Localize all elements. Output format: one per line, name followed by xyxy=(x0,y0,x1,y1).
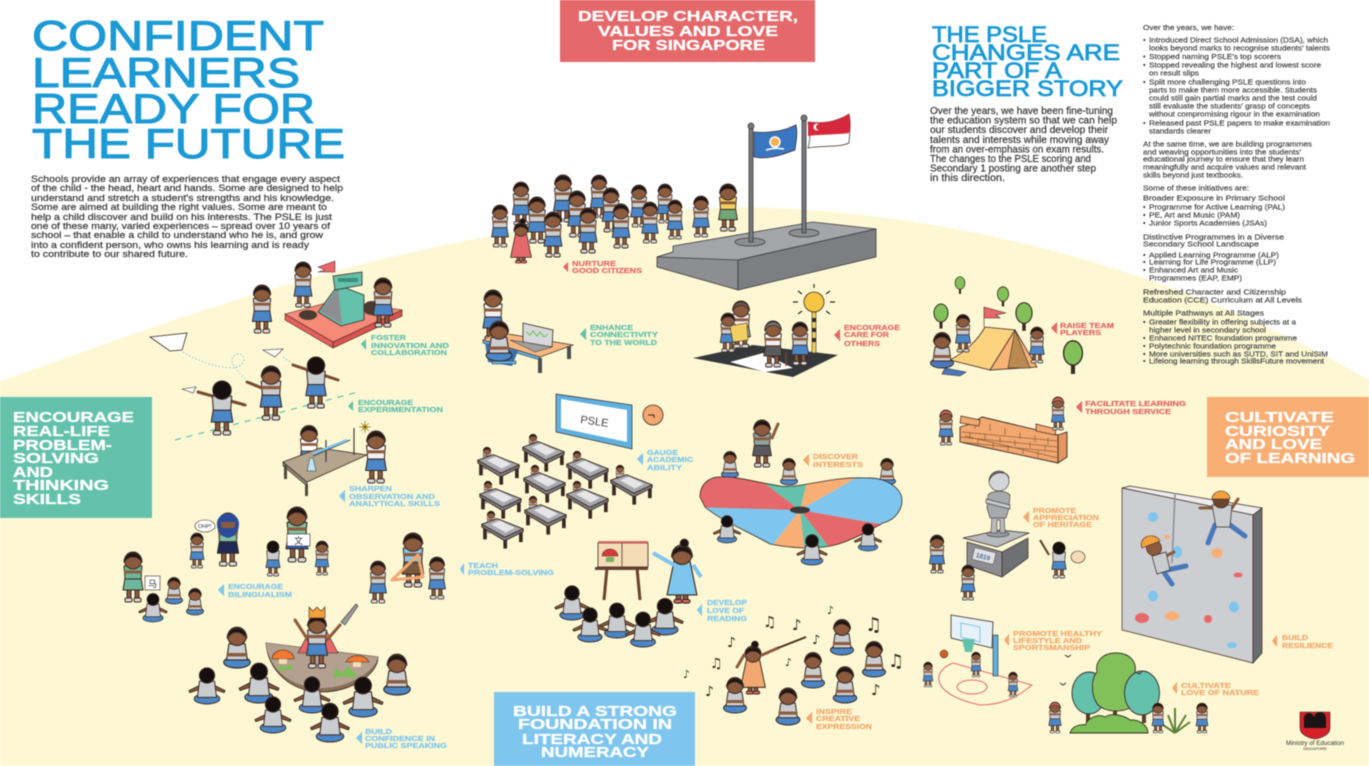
scene: teach problem solving xyxy=(370,533,445,603)
label: promote heritage: OF HERITAGE xyxy=(1033,520,1092,529)
label: facilitate learning: FACILITATE LEARNING xyxy=(1085,399,1186,408)
music notes: ♪ xyxy=(785,656,792,669)
label: encourage care: OTHERS xyxy=(844,339,880,348)
heading: the PSLE changes: CHANGES ARE xyxy=(932,40,1120,65)
banner: real-life problem solving: ENCOURAGE xyxy=(13,410,134,426)
scene: laptop and connectivity xyxy=(483,290,573,373)
initiatives text column: Enhanced Art and Music xyxy=(1149,266,1238,274)
banner: develop character xyxy=(560,0,815,62)
initiatives text column: Junior Sports Academies (JSAs) xyxy=(1149,218,1267,228)
label: gauge academic ability: GAUGE xyxy=(647,448,678,457)
heading: the PSLE changes: BIGGER STORY xyxy=(932,76,1123,101)
scene: crossing, encourage care xyxy=(693,284,838,377)
school flag xyxy=(754,125,797,158)
music notes: ♫ xyxy=(888,651,904,672)
initiatives text column: • xyxy=(1143,202,1146,212)
label: raise team players: PLAYERS xyxy=(1060,328,1101,337)
wall clock xyxy=(643,405,663,425)
PSLE story paragraph: Secondary 1 posting are another step xyxy=(930,164,1096,175)
intro paragraph: Some are aimed at building the right values. Some are meant to xyxy=(31,201,327,212)
label: enhance connectivity: TO THE WORLD xyxy=(590,338,657,347)
scene: paper planes xyxy=(150,333,358,440)
label: encourage bilingualism: ENCOURAGE xyxy=(228,582,283,591)
scene: climbing wall xyxy=(1122,486,1262,663)
label: foster innovation: FOSTER xyxy=(371,333,407,342)
initiatives text column: Greater flexibility in offering subjects at a xyxy=(1149,318,1297,326)
plinth xyxy=(963,530,1029,577)
label: foster innovation xyxy=(361,333,449,357)
label: inspire creative expression: INSPIRE xyxy=(816,707,852,716)
initiatives text column: • xyxy=(1143,266,1146,274)
heading: the PSLE changes xyxy=(932,22,1123,101)
label: nurture good citizens: NURTURE xyxy=(572,259,616,268)
banner: real-life problem solving: SOLVING xyxy=(13,451,99,467)
heading: the PSLE changes: PART OF A xyxy=(932,58,1062,83)
label: cultivate love of nature: CULTIVATE xyxy=(1181,681,1231,690)
intro paragraph: understand and stretch a student's strengths and his knowledge. xyxy=(31,192,334,203)
label: enhance connectivity: CONNECTIVITY xyxy=(590,330,658,339)
initiatives text column: Stopped naming PSLE's top scorers xyxy=(1149,52,1281,61)
banner: cultivate curiosity: CULTIVATE xyxy=(1225,410,1334,426)
teacher with card xyxy=(286,507,310,562)
whiteboard: PSLE xyxy=(580,414,609,430)
whiteboard xyxy=(556,394,632,449)
initiatives text column: PE, Art and Music (PAM) xyxy=(1149,210,1240,220)
label: teach problem solving: TEACH xyxy=(468,561,498,570)
intro paragraph xyxy=(31,173,343,259)
initiatives text column: Multiple Pathways at All Stages xyxy=(1143,308,1264,318)
scene: bilingual lessons: 马 xyxy=(148,579,157,589)
music notes: ♪ xyxy=(812,633,820,648)
intro paragraph: into a confident person, who owns his learning and is ready xyxy=(31,239,309,250)
label: develop love of reading: DEVELOP xyxy=(707,598,747,607)
music notes: ♪ xyxy=(871,681,881,699)
intro paragraph: help a child discover and build on his interests. The PSLE is just xyxy=(31,211,332,222)
initiatives text column: Enhanced NITEC foundation programme xyxy=(1149,334,1297,342)
label: discover interests: DISCOVER xyxy=(813,452,859,461)
seated audience xyxy=(189,627,410,742)
banner: literacy and numeracy xyxy=(494,692,695,766)
label: sharpen observation: OBSERVATION AND xyxy=(349,492,435,501)
banner: real-life problem solving: AND xyxy=(13,465,53,481)
initiatives text column: Some of these initiatives are: xyxy=(1143,184,1249,192)
intro paragraph: Schools provide an array of experiences that engage every aspect xyxy=(31,173,340,184)
label: build resilience: RESILIENCE xyxy=(1282,641,1333,650)
label: inspire creative expression: EXPRESSION xyxy=(816,722,872,731)
banner: literacy and numeracy: NUMERACY xyxy=(541,745,649,761)
label: cultivate love of nature: LOVE OF NATURE xyxy=(1181,688,1259,697)
label: nurture good citizens: GOOD CITIZENS xyxy=(572,266,642,275)
mushrooms and grass xyxy=(272,650,369,677)
banner: develop character: DEVELOP CHARACTER, xyxy=(578,9,798,25)
music notes: ♪ xyxy=(792,616,802,634)
plaque 1819: 1819 xyxy=(975,552,991,563)
banner: cultivate curiosity: OF LEARNING xyxy=(1225,451,1355,467)
label: enhance connectivity: ENHANCE xyxy=(590,323,633,332)
label: build resilience xyxy=(1272,633,1333,650)
initiatives text column: Refreshed Character and Citizenship xyxy=(1143,288,1286,296)
initiatives text column: Learning for Life Programme (LLP) xyxy=(1149,258,1276,266)
initiatives text column: Polytechnic foundation programme xyxy=(1149,342,1276,350)
scene: basketball court xyxy=(923,615,1032,705)
intro paragraph: of the child - the head, heart and hands. Some are designed to help xyxy=(31,182,343,193)
logo: Ministry of Education xyxy=(1286,712,1344,751)
scene: heritage statue xyxy=(929,471,1085,600)
banner: real-life problem solving: REAL-LIFE xyxy=(13,424,110,440)
scene: music conducting xyxy=(683,604,904,725)
label: build confidence xyxy=(356,727,447,750)
intro paragraph: one of these many, varied experiences – spread over 10 years of xyxy=(31,220,330,231)
initiatives text column: Split more challenging PSLE questions into xyxy=(1149,78,1306,86)
label: teach problem solving: PROBLEM-SOLVING xyxy=(468,568,554,577)
initiatives text column: • xyxy=(1143,118,1146,128)
label: raise team players: RAISE TEAM xyxy=(1060,321,1114,330)
label: encourage care xyxy=(834,323,900,348)
initiatives text column: educational journey to ensure that they learn xyxy=(1143,154,1304,164)
initiatives text column: • xyxy=(1143,52,1146,61)
label: foster innovation: COLLABORATION xyxy=(371,348,447,357)
yellow ground arc xyxy=(0,207,1369,766)
initiatives text column: • xyxy=(1143,60,1146,70)
label: encourage experimentation: ENCOURAGE xyxy=(358,398,413,407)
banner: real-life problem solving: PROBLEM- xyxy=(13,438,112,454)
initiatives text column: skills beyond just textbooks. xyxy=(1143,170,1243,180)
initiatives text column: Programme for Active Learning (PAL) xyxy=(1149,202,1285,212)
king with cape and sword xyxy=(295,604,358,668)
label: promote heritage xyxy=(1023,506,1099,529)
initiatives text column: • xyxy=(1143,210,1146,220)
banner: develop character: VALUES AND LOVE xyxy=(598,24,778,40)
initiatives text column: Applied Learning Programme (ALP) xyxy=(1149,250,1279,260)
assembled students xyxy=(492,175,737,263)
title: confident learners: LEARNERS xyxy=(32,49,300,96)
conductor xyxy=(737,637,806,694)
banner: literacy and numeracy: FOUNDATION IN xyxy=(518,717,672,733)
label: encourage experimentation xyxy=(348,398,443,414)
initiatives text column: Over the years, we have: xyxy=(1143,23,1234,32)
label: gauge academic ability xyxy=(637,448,694,472)
banner: real-life problem solving: THINKING xyxy=(13,478,109,494)
scene: nature trees xyxy=(1049,653,1208,733)
music notes: ♪ xyxy=(705,684,714,700)
banner: develop character: FOR SINGAPORE xyxy=(612,38,765,54)
parachute xyxy=(700,476,902,548)
initiatives text column: • xyxy=(1143,350,1146,358)
initiatives text column: Lifelong learning through SkillsFuture movement xyxy=(1149,356,1324,366)
label: promote heritage: APPRECIATION xyxy=(1033,513,1099,522)
statue figure xyxy=(986,471,1010,537)
logo: Ministry of Education: Ministry of Education xyxy=(1286,741,1344,747)
initiatives text column: higher level in secondary school xyxy=(1149,326,1266,334)
title: confident learners: READY FOR xyxy=(32,85,315,132)
scene: bilingual lessons xyxy=(123,507,329,622)
reading teacher xyxy=(653,539,701,603)
speech bubble: OHP! xyxy=(198,524,212,530)
flag poles xyxy=(735,115,819,246)
music notes: ♪ xyxy=(827,604,834,617)
scene: story reading xyxy=(555,539,701,647)
PSLE story paragraph: Over the years, we have been fine-tuning xyxy=(930,106,1113,117)
label: encourage care: CARE FOR xyxy=(844,330,890,339)
label: develop love of reading: LOVE OF xyxy=(707,606,745,615)
banner: literacy and numeracy: LITERACY AND xyxy=(522,732,662,748)
label: promote heritage: PROMOTE xyxy=(1033,506,1076,515)
initiatives text column: • xyxy=(1143,258,1146,266)
choir students xyxy=(724,620,886,725)
music notes: ♫ xyxy=(865,614,882,636)
initiatives text column: • xyxy=(1143,334,1146,342)
initiatives text column: Broader Exposure in Primary School xyxy=(1143,194,1285,202)
PSLE story paragraph: in this direction. xyxy=(930,173,1005,184)
easel and book xyxy=(595,541,648,600)
initiatives text column: • xyxy=(1143,342,1146,350)
label: promote healthy lifestyle: LIFESTYLE AND xyxy=(1013,636,1082,645)
title: confident learners xyxy=(32,12,345,167)
scene: camping tent xyxy=(930,277,1082,376)
music notes: ♫ xyxy=(763,613,776,631)
label: build resilience: BUILD xyxy=(1282,633,1308,642)
label: encourage bilingualism xyxy=(218,582,292,599)
PSLE story paragraph: from an over-emphasis on exam results. xyxy=(930,144,1104,156)
initiatives text column: meaningfully and acquire values and relevant xyxy=(1143,162,1306,172)
initiatives text column: • xyxy=(1143,356,1146,366)
PSLE story paragraph: The changes to the PSLE scoring and xyxy=(930,154,1091,165)
label: develop love of reading xyxy=(697,598,747,623)
banner: real-life problem solving: SKILLS xyxy=(13,492,81,508)
initiatives text column: More universities such as SUTD, SIT and UniSIM xyxy=(1149,350,1328,358)
music notes: ♫ xyxy=(710,656,723,672)
label: sharpen observation xyxy=(339,484,440,508)
plaque 1819 xyxy=(972,548,996,564)
initiatives text column: • xyxy=(1143,218,1146,228)
label: encourage experimentation: EXPERIMENTATION xyxy=(358,405,443,414)
PSLE story paragraph: talents and interests while moving away xyxy=(930,135,1109,146)
title: confident learners: THE FUTURE xyxy=(32,120,345,167)
climber at top xyxy=(1200,491,1245,543)
PSLE story paragraph: our students discover and develop their xyxy=(930,125,1109,136)
intro paragraph: to contribute to our shared future. xyxy=(31,248,188,259)
label: sharpen observation: SHARPEN xyxy=(349,484,392,493)
intro paragraph: school – that enable a child to understand who he is, and grow xyxy=(31,229,323,240)
label: raise team players xyxy=(1051,321,1114,337)
label: gauge academic ability: ACADEMIC xyxy=(647,455,694,464)
Singapore flag xyxy=(808,114,850,148)
label: inspire creative expression: CREATIVE xyxy=(816,714,860,723)
climbing holds xyxy=(1135,512,1242,648)
banner: real-life problem solving xyxy=(0,397,152,518)
initiatives text column: still evaluate the students' grasp of concepts xyxy=(1149,102,1310,110)
initiatives text column: • xyxy=(1143,36,1146,44)
label: encourage care: ENCOURAGE xyxy=(844,323,900,332)
title: confident learners: CONFIDENT xyxy=(32,12,324,59)
PSLE story paragraph xyxy=(930,106,1117,184)
initiatives text column: Distinctive Programmes in a Diverse xyxy=(1143,232,1284,242)
music notes: ♪ xyxy=(727,635,736,651)
label: promote healthy lifestyle: SPORTSMANSHIP xyxy=(1013,643,1090,652)
initiatives text column: Education (CCE) Curriculum at All Levels xyxy=(1143,296,1302,304)
label: build confidence: BUILD xyxy=(365,727,392,736)
initiatives text column: standards clearer xyxy=(1149,126,1212,136)
label: foster innovation: INNOVATION AND xyxy=(371,341,449,350)
label: facilitate learning xyxy=(1076,399,1186,416)
stepped platform xyxy=(657,222,876,290)
label: sharpen observation: ANALYTICAL SKILLS xyxy=(349,499,440,508)
label: encourage bilingualism: BILINGUALISM xyxy=(228,590,292,599)
label: nurture good citizens xyxy=(563,259,642,275)
banner: cultivate curiosity xyxy=(1207,397,1369,477)
teacher in hijab xyxy=(217,513,239,566)
initiatives text column: on result slips xyxy=(1149,68,1199,78)
label: develop love of reading: READING xyxy=(707,614,747,623)
scene: exam classroom xyxy=(478,394,663,548)
label: promote healthy lifestyle: PROMOTE HEALTHY xyxy=(1013,629,1102,638)
wall xyxy=(1122,486,1262,663)
banner: cultivate curiosity: CURIOSITY xyxy=(1225,424,1330,440)
initiatives text column: • xyxy=(1143,250,1146,260)
speech bubble xyxy=(195,520,215,532)
label: build confidence: PUBLIC SPEAKING xyxy=(365,741,447,750)
label: inspire creative expression xyxy=(806,707,872,731)
climber on rope xyxy=(1141,536,1186,584)
initiatives text column: Secondary School Landscape xyxy=(1143,240,1259,248)
scene: robot innovation xyxy=(252,261,402,348)
heading: the PSLE changes: THE PSLE xyxy=(932,22,1047,47)
banner: cultivate curiosity: AND LOVE xyxy=(1225,437,1322,453)
initiatives text column xyxy=(1143,23,1330,366)
music notes xyxy=(683,604,904,700)
scene: brick wall service xyxy=(939,397,1067,463)
exam desks and students xyxy=(478,434,652,548)
initiatives text column: Introduced Direct School Admission (DSA), which xyxy=(1149,36,1328,44)
label: discover interests xyxy=(803,452,863,469)
initiatives text column: • xyxy=(1143,318,1146,326)
logo: Ministry of Education: SINGAPORE xyxy=(1303,746,1327,751)
stage xyxy=(266,643,378,692)
initiatives text column: and weaving opportunities into the students' xyxy=(1143,148,1302,156)
label: gauge academic ability: ABILITY xyxy=(647,463,682,472)
teacher with card: 文 xyxy=(294,535,303,546)
initiatives text column: Released past PSLE papers to make examination xyxy=(1149,118,1330,128)
initiatives text column: Stopped revealing the highest and lowest score xyxy=(1149,60,1321,70)
scene: parachute game xyxy=(690,420,910,565)
initiatives text column: without compromising rigour in the examination xyxy=(1148,110,1320,118)
music notes: ♪ xyxy=(683,668,690,681)
initiatives text column: At the same time, we are building programmes xyxy=(1143,140,1312,148)
label: build confidence: CONFIDENCE IN xyxy=(365,734,435,743)
initiatives text column: looks beyond marks to recognise students' talents xyxy=(1149,44,1330,52)
initiatives text column: • xyxy=(1143,78,1146,86)
banner: literacy and numeracy: BUILD A STRONG xyxy=(513,704,677,720)
label: discover interests: INTERESTS xyxy=(813,460,863,469)
initiatives text column: parts to make them more accessible. Students xyxy=(1149,86,1317,94)
scene: science lab xyxy=(283,421,386,496)
scene: flag raising, nurture good citizens xyxy=(492,114,876,290)
scene: public speaking stage xyxy=(189,604,410,742)
label: enhance connectivity xyxy=(580,323,658,347)
PSLE story paragraph: the education system so that we can help xyxy=(930,116,1117,127)
label: facilitate learning: THROUGH SERVICE xyxy=(1085,407,1171,416)
label: cultivate love of nature xyxy=(1172,681,1259,697)
initiatives text column: could still gain partial marks and the test could xyxy=(1149,94,1317,102)
initiatives text column: Programmes (EAP, EMP) xyxy=(1149,274,1242,282)
label: promote healthy lifestyle xyxy=(1004,629,1102,652)
label: teach problem solving xyxy=(460,561,554,577)
